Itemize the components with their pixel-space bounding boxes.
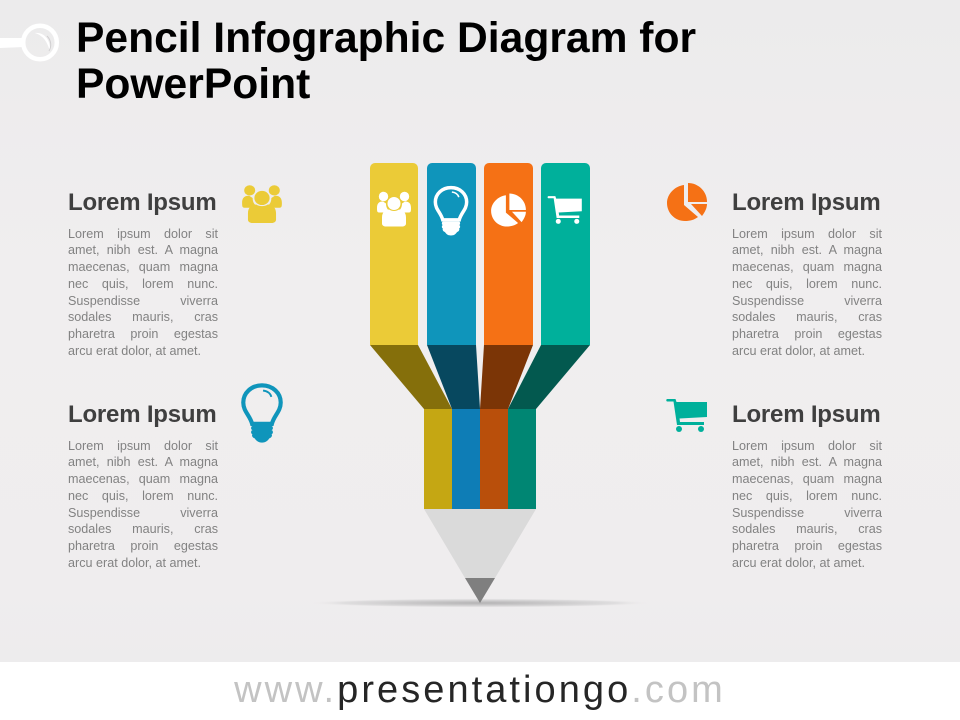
body text: nec quis, lorem nunc. xyxy=(68,277,218,291)
body text: Lorem ipsum dolor sit xyxy=(68,438,218,452)
title xyxy=(76,14,696,108)
body text: maecenas, quam magna xyxy=(68,472,218,486)
body text: nec quis, lorem nunc. xyxy=(732,489,882,503)
body text xyxy=(732,226,882,358)
body text: sodales mauris, cras xyxy=(732,522,882,536)
green strip xyxy=(541,163,590,345)
blue strip xyxy=(427,163,476,345)
pencil tip xyxy=(424,509,536,578)
icon: pie on strip xyxy=(491,193,526,227)
body text: pharetra proin egestas xyxy=(68,539,218,553)
body text: pharetra proin egestas xyxy=(732,327,882,341)
title: PowerPoint xyxy=(76,60,310,108)
body text: Suspendisse viverra xyxy=(68,294,218,308)
body text: pharetra proin egestas xyxy=(68,327,218,341)
shadow under pencil xyxy=(308,598,652,608)
icon: pie orange xyxy=(667,183,707,221)
decorative ring connector xyxy=(0,26,57,59)
body text: arcu erat dolor, at amet. xyxy=(68,344,201,358)
body text xyxy=(68,438,218,570)
body text: nec quis, lorem nunc. xyxy=(732,277,882,291)
pencil body xyxy=(424,409,452,509)
heading: Lorem Ipsum xyxy=(732,189,880,216)
body text: maecenas, quam magna xyxy=(732,260,882,274)
icon: cart on strip xyxy=(548,196,582,224)
body text: amet, nibh est. A magna xyxy=(68,243,218,257)
body text: pharetra proin egestas xyxy=(732,539,882,553)
icon: people yellow xyxy=(242,185,282,223)
footer url: www.presentationgo.com xyxy=(234,669,726,711)
body text: amet, nibh est. A magna xyxy=(732,243,882,257)
pencil xyxy=(370,163,590,603)
icon: cart green xyxy=(666,399,707,432)
body text: Lorem ipsum dolor sit xyxy=(68,226,218,240)
body text: sodales mauris, cras xyxy=(68,310,218,324)
body text: arcu erat dolor, at amet. xyxy=(732,344,865,358)
body text: sodales mauris, cras xyxy=(68,522,218,536)
folds xyxy=(370,345,452,409)
body text xyxy=(732,438,882,570)
body text: Suspendisse viverra xyxy=(732,506,882,520)
text block: bottom right xyxy=(732,401,882,570)
body text: maecenas, quam magna xyxy=(68,260,218,274)
text block: top left xyxy=(68,189,218,358)
body text: maecenas, quam magna xyxy=(732,472,882,486)
body text: amet, nibh est. A magna xyxy=(68,455,218,469)
text block: top right xyxy=(732,189,882,358)
body text: Lorem ipsum dolor sit xyxy=(732,438,882,452)
body text: Lorem ipsum dolor sit xyxy=(732,226,882,240)
icon: people on strip xyxy=(377,192,411,226)
heading: Lorem Ipsum xyxy=(68,189,216,216)
body text xyxy=(68,226,218,358)
body text: nec quis, lorem nunc. xyxy=(68,489,218,503)
pencil lead xyxy=(465,578,495,603)
title: Pencil Infographic Diagram for xyxy=(76,14,696,62)
text block: bottom left xyxy=(68,401,218,570)
body text: sodales mauris, cras xyxy=(732,310,882,324)
body text: arcu erat dolor, at amet. xyxy=(732,556,865,570)
yellow strip xyxy=(370,163,418,345)
body text: Suspendisse viverra xyxy=(732,294,882,308)
icon: bulb on strip xyxy=(435,188,467,235)
icon: bulb blue xyxy=(243,385,281,443)
heading: Lorem Ipsum xyxy=(732,401,880,428)
footer url xyxy=(0,662,960,720)
body text: arcu erat dolor, at amet. xyxy=(68,556,201,570)
heading: Lorem Ipsum xyxy=(68,401,216,428)
body text: amet, nibh est. A magna xyxy=(732,455,882,469)
orange strip xyxy=(484,163,533,345)
body text: Suspendisse viverra xyxy=(68,506,218,520)
